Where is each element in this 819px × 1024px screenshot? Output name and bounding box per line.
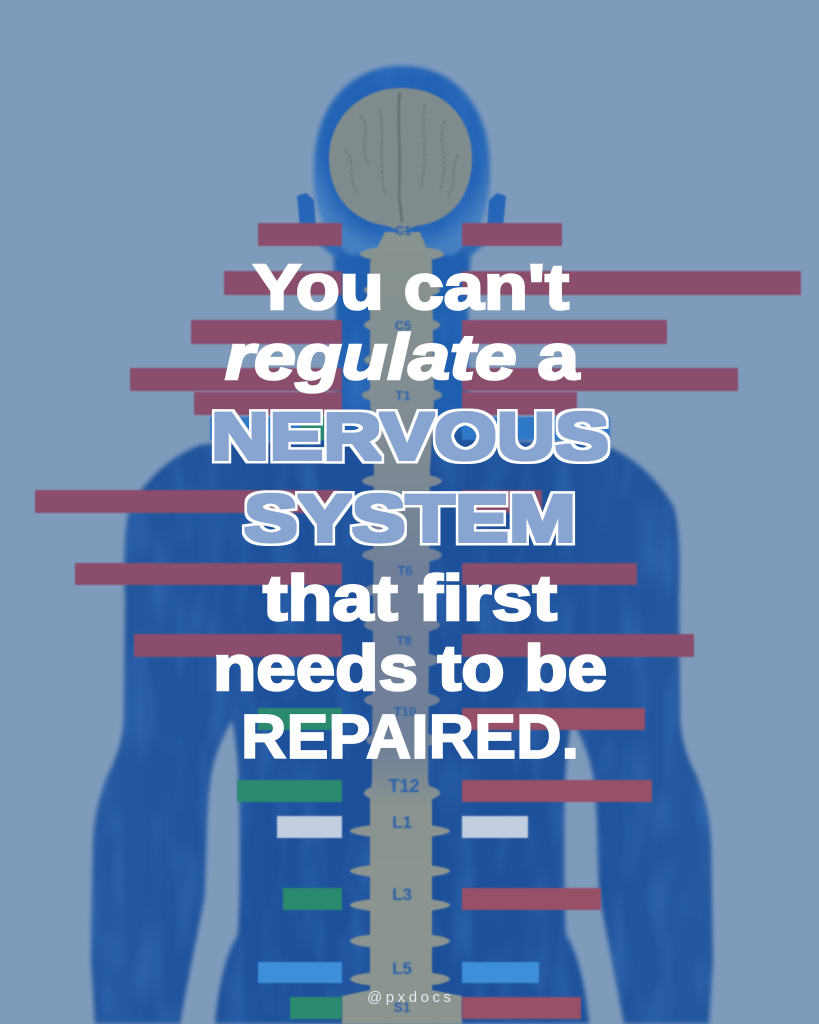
red bars: upper [35, 223, 801, 657]
brain [329, 88, 472, 232]
line: NERVOUS: NERVOUS [211, 399, 609, 473]
line: regulate a: regulate a [225, 321, 579, 393]
vertebra labels: T10 [394, 704, 416, 719]
vertebra labels: T12 [388, 776, 420, 796]
nerve bars [35, 223, 801, 1019]
blue band behind NERVOUS [210, 417, 610, 440]
green bars [237, 417, 342, 1019]
vertebra labels: S1 [393, 999, 411, 1015]
line: that first: that first [263, 562, 557, 634]
handle: @pxdocs [367, 989, 452, 1006]
anatomical figure [91, 66, 713, 1024]
head [314, 66, 490, 255]
line: SYSTEM: SYSTEM [244, 481, 576, 555]
headline [211, 251, 609, 772]
vertebra labels: C1 [395, 223, 411, 238]
vertebra labels: T1 [395, 388, 411, 403]
line: needs to be: needs to be [213, 632, 607, 704]
vertebra labels [388, 223, 420, 1015]
ears [297, 193, 506, 228]
pale bars [277, 816, 528, 838]
red bars: lower [462, 708, 652, 1019]
vertebra labels: L3 [392, 885, 412, 904]
line: REPAIRED.: REPAIRED. [241, 703, 579, 772]
line: You can't: You can't [253, 251, 569, 323]
vertebra labels: T6 [397, 563, 413, 578]
light blue bars [258, 962, 539, 983]
body silhouette [91, 225, 713, 1024]
vertebra labels: L5 [392, 959, 412, 978]
vertebra labels: L1 [392, 813, 412, 832]
vertebra labels: C5 [395, 318, 411, 333]
vertebra labels: T8 [396, 633, 412, 648]
spine [342, 232, 462, 1024]
